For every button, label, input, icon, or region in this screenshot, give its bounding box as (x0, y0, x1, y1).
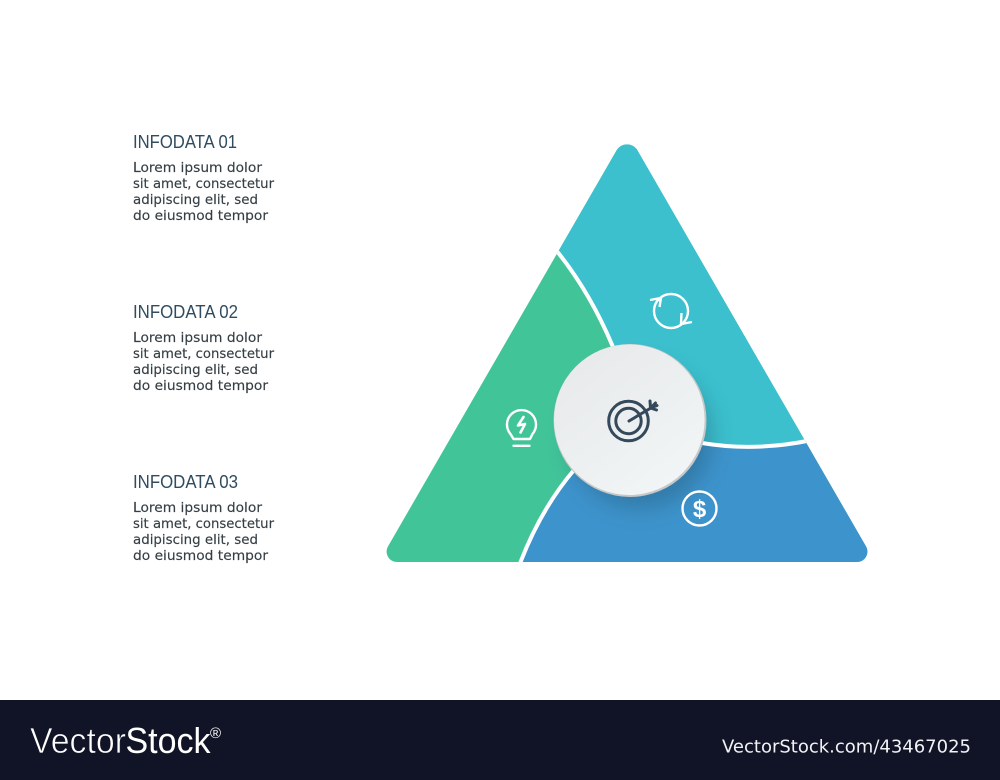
text block: infodata 03 (133, 472, 275, 564)
body text: infodata 02: sit amet, consectetur (133, 347, 275, 362)
body text: infodata 02: Lorem ipsum dolor (133, 331, 263, 346)
divider: green and blue (519, 470, 574, 566)
disc rim (554, 344, 706, 497)
icon: dollar coin: $ (693, 496, 707, 523)
segment: green (380, 135, 880, 570)
center disc (554, 344, 706, 497)
heading: infodata 01: INFODATA 01 (133, 132, 237, 152)
logo: vectorstock: ® (210, 725, 221, 742)
disc face (554, 344, 705, 495)
body text: infodata 02: do eiusmod tempor (133, 379, 269, 394)
body text: infodata 03: sit amet, consectetur (133, 517, 275, 532)
divider: teal and blue (702, 440, 812, 447)
triangle segments (386, 144, 868, 562)
body text: infodata 01: adipiscing elit, sed (133, 193, 258, 208)
segment: blue (522, 442, 868, 562)
heading: infodata 03: INFODATA 03 (133, 472, 238, 492)
icon: dollar coin (682, 492, 716, 526)
logo: vectorstock (30, 720, 221, 761)
triangle diagram (386, 144, 868, 562)
logo: vectorstock: Stock (126, 720, 211, 761)
heading: infodata 02: INFODATA 02 (133, 302, 238, 322)
footer bar (0, 700, 1000, 780)
body text: infodata 03: do eiusmod tempor (133, 549, 269, 564)
body text: infodata 01: Lorem ipsum dolor (133, 161, 263, 176)
segment: teal (558, 144, 806, 445)
body text: infodata 02 (133, 331, 275, 394)
footer background (0, 700, 1000, 780)
icon: light bulb (507, 410, 536, 446)
body text: infodata 02: adipiscing elit, sed (133, 363, 258, 378)
body text: infodata 03: adipiscing elit, sed (133, 533, 258, 548)
footer url: VectorStock.com/43467025 (722, 736, 971, 758)
text block: infodata 01 (133, 132, 275, 224)
body text: infodata 03: Lorem ipsum dolor (133, 501, 263, 516)
logo: vectorstock: Vector (30, 720, 126, 761)
divider: green and teal (556, 250, 613, 347)
body text: infodata 03 (133, 501, 275, 564)
icon: refresh arrows (650, 294, 692, 328)
body text: infodata 01: sit amet, consectetur (133, 177, 275, 192)
body text: infodata 01 (133, 161, 275, 224)
body text: infodata 01: do eiusmod tempor (133, 209, 269, 224)
text block: infodata 02 (133, 302, 275, 394)
icon: target with arrow (609, 401, 657, 441)
disc shadow (568, 364, 712, 508)
